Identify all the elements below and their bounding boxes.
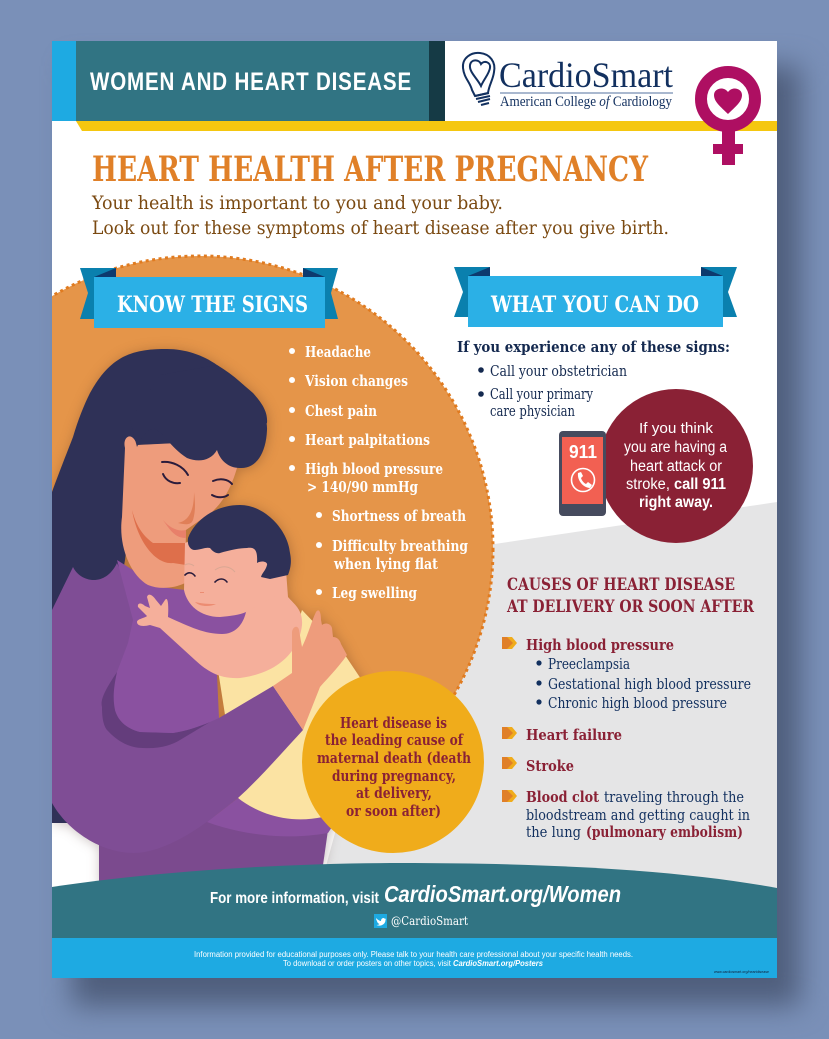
list: causes: (pulmonary embolism) — [586, 824, 743, 841]
text: what to do if you experience signs: Call your obstetrician — [490, 364, 627, 380]
logo: CardioSmart: CardioSmart — [499, 55, 673, 95]
footer: teal band: @CardioSmart — [391, 913, 468, 928]
icon: arrow markers — [502, 637, 517, 802]
list: signs and symptoms: Headache — [305, 344, 371, 361]
icon: female symbol with heart — [701, 72, 755, 165]
heading: causes of heart disease: CAUSES OF HEART DISEASE — [507, 575, 735, 595]
list: causes: Chronic high blood pressure — [548, 696, 727, 712]
banner: know the signs — [80, 268, 338, 328]
list: signs and symptoms: Heart palpitations — [305, 432, 430, 449]
callout: call 911: If you think — [639, 421, 714, 437]
callout: call 911: you are having a — [624, 439, 727, 456]
callout: leading cause of maternal death: at delivery, — [356, 785, 432, 802]
text: what to do if you experience signs: care physician — [490, 404, 575, 420]
mother's face — [121, 436, 240, 588]
subtitle: Look out for these symptoms of heart disease after you give birth. — [92, 217, 669, 239]
list: causes: Preeclampsia — [548, 657, 630, 673]
callout: call 911 — [599, 389, 753, 543]
heading: causes of heart disease — [506, 575, 755, 617]
callout: call 911: stroke, call 911 — [626, 476, 726, 493]
list: causes: the lung — [526, 825, 581, 841]
list: causes: Gestational high blood pressure — [548, 677, 751, 693]
panel: know the signs — [52, 254, 494, 881]
poster sheet — [52, 41, 777, 978]
list: signs and symptoms: > 140/90 mmHg — [307, 479, 418, 496]
list: signs and symptoms: Vision changes — [304, 373, 408, 390]
footer: disclaimer: Information provided for educational purposes only. Please talk to your health care professional about your specific health needs. — [194, 950, 633, 959]
callout: leading cause of maternal death: during pregnancy, — [332, 768, 456, 785]
text: what to do if you experience signs: Call your primary — [490, 387, 594, 403]
mother's hair — [130, 365, 267, 468]
list: causes: High blood pressure — [526, 637, 674, 654]
list: signs and symptoms: Shortness of breath — [332, 508, 466, 525]
list: signs and symptoms — [289, 344, 468, 602]
title: HEART HEALTH AFTER PREGNANCY — [92, 149, 649, 190]
text: what to do if you experience signs: If you experience any of these signs: — [457, 339, 730, 356]
footer: teal band: CardioSmart.org/Women — [384, 881, 621, 907]
callout: leading cause of maternal death: maternal death (death — [317, 750, 471, 767]
list: signs and symptoms: Leg swelling — [332, 585, 417, 602]
illustration: mother and baby — [52, 349, 365, 885]
header band — [52, 41, 777, 131]
grey background panel — [326, 502, 777, 892]
list: causes: Heart failure — [526, 727, 622, 744]
list: causes: Blood clot — [526, 789, 599, 806]
footer: teal band: For more information, visit — [210, 890, 379, 907]
footer: disclaimer — [52, 938, 777, 978]
subtitle: Your health is important to you and your baby. — [91, 192, 503, 214]
banner: know the signs: KNOW THE SIGNS — [117, 292, 308, 318]
footer: disclaimer: To download or order posters on other topics, visit CardioSmart.org/Posters — [283, 959, 544, 968]
list: causes: traveling through the — [604, 790, 744, 806]
list: signs and symptoms: High blood pressure — [305, 461, 443, 478]
callout: call 911: right away. — [639, 494, 713, 511]
list: causes — [502, 637, 751, 841]
callout: leading cause of maternal death: Heart disease is — [340, 715, 447, 732]
callout: leading cause of maternal death: or soon after) — [346, 803, 441, 820]
callout: leading cause of maternal death — [302, 671, 484, 853]
footer: teal band — [52, 863, 777, 938]
list: causes: Stroke — [526, 758, 574, 775]
list: causes: bloodstream and getting caught in — [526, 808, 750, 824]
footer: disclaimer: www.cardiosmart.org/heartdisease — [714, 969, 770, 974]
logo: CardioSmart — [463, 53, 673, 110]
baby — [137, 505, 302, 678]
callout: leading cause of maternal death: the leading cause of — [325, 732, 464, 749]
callout: call 911: heart attack or — [630, 458, 722, 475]
list: signs and symptoms: Chest pain — [305, 403, 377, 420]
header title: WOMEN AND HEART DISEASE — [90, 68, 412, 96]
text: what to do if you experience signs — [457, 339, 730, 420]
icon: phone showing 911 — [559, 431, 606, 516]
list: signs and symptoms: when lying flat — [333, 556, 438, 573]
mother's hand — [273, 610, 347, 730]
logo: CardioSmart: American College of Cardiology — [500, 94, 673, 110]
subtitle — [91, 192, 669, 239]
list: signs and symptoms: Difficulty breathing — [332, 538, 468, 555]
heading: causes of heart disease: AT DELIVERY OR SOON AFTER — [506, 597, 755, 617]
banner: what you can do: WHAT YOU CAN DO — [490, 292, 699, 318]
icon: phone showing 911: 911 — [569, 442, 597, 462]
banner: what you can do — [454, 267, 737, 327]
icon: twitter — [374, 914, 387, 928]
